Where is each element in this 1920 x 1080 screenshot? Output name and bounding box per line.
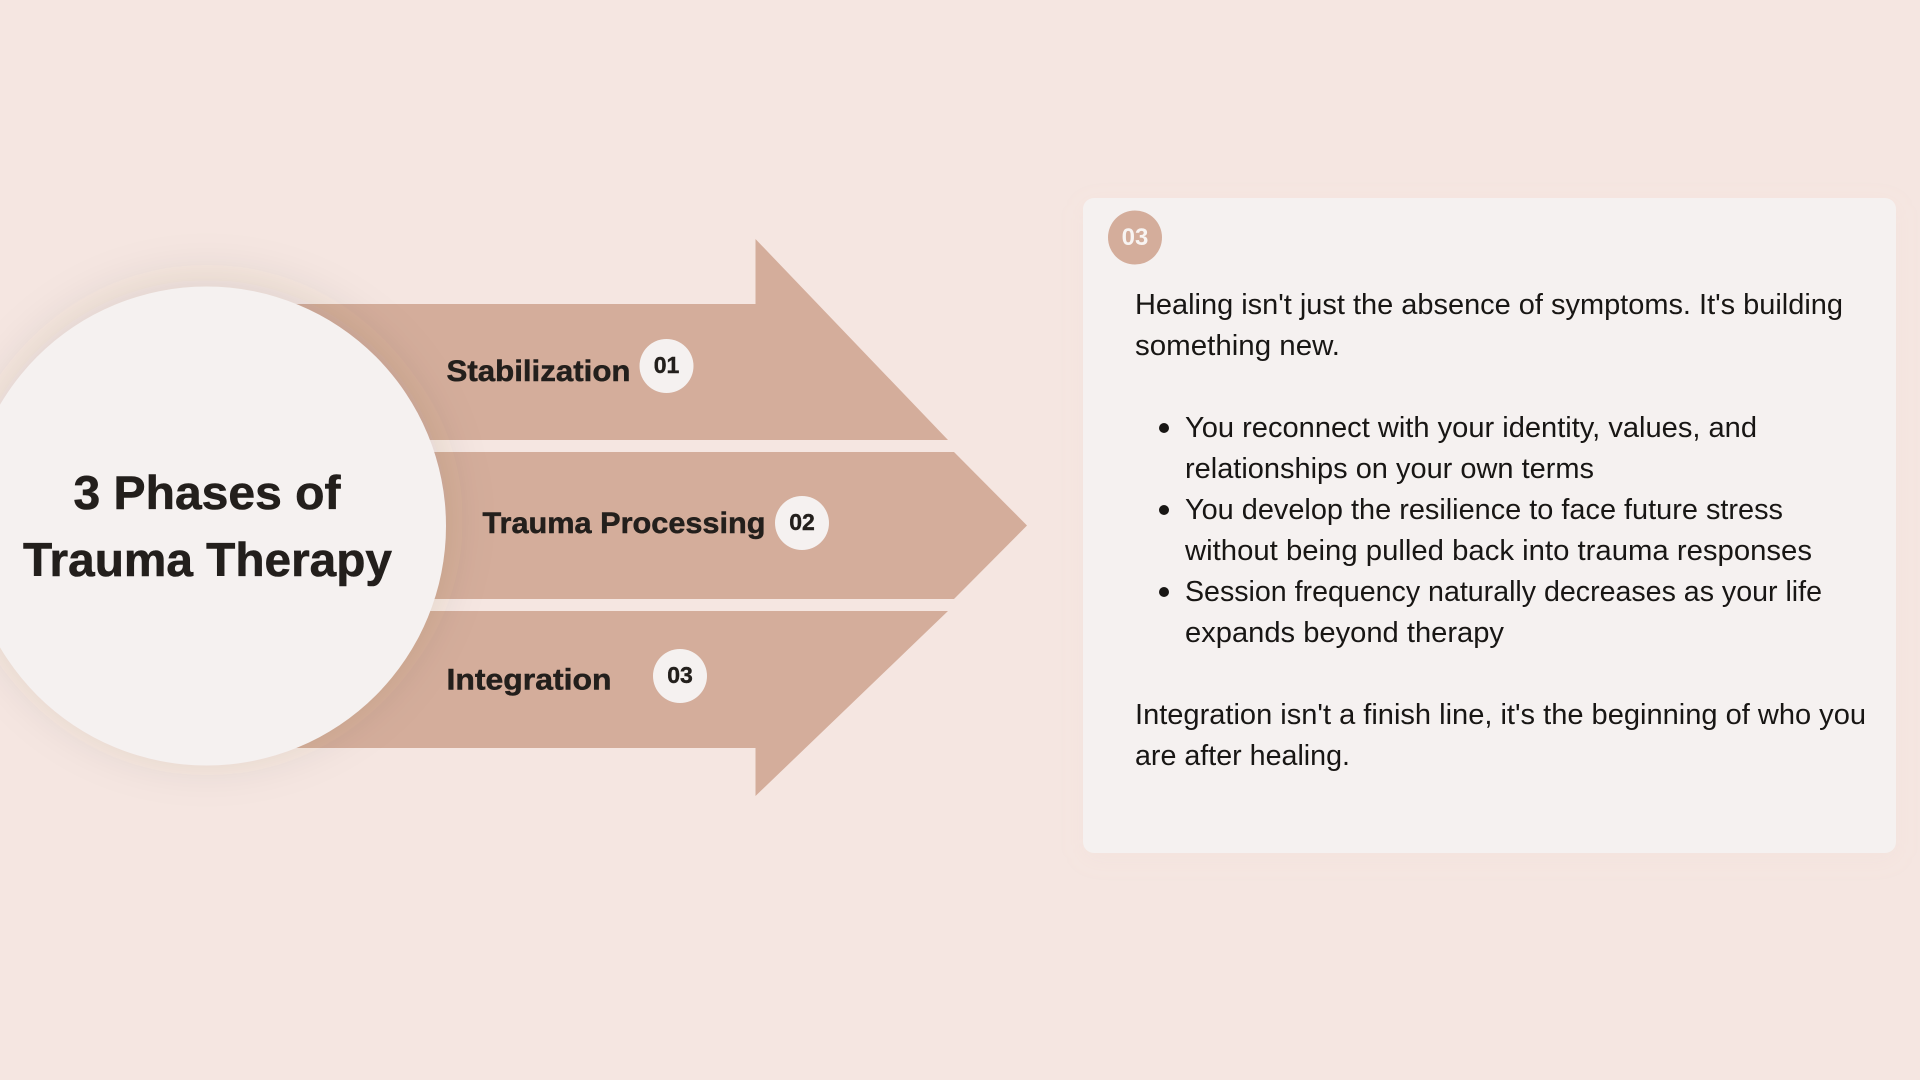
phase 1 label: Stabilization — [446, 355, 630, 388]
detail panel — [1083, 198, 1896, 853]
intro paragraph — [1135, 289, 1843, 362]
title — [23, 466, 392, 586]
badge 02: 02 — [789, 509, 815, 535]
panel shadow — [1083, 204, 1896, 859]
phase 2 label: Trauma Processing — [482, 507, 766, 540]
bullet 2: You develop the resilience to face future stress — [1185, 494, 1783, 526]
bullet 2 — [1159, 494, 1812, 567]
badge 01: 01 — [654, 352, 679, 378]
bullet 3 — [1159, 576, 1822, 649]
badge 03: 03 — [667, 662, 693, 688]
title: 3 Phases of — [74, 466, 341, 519]
panel badge 03 — [1108, 210, 1162, 264]
bullet 2: without being pulled back into trauma responses — [1184, 535, 1812, 567]
arrow group: three phase arrows — [250, 239, 1027, 796]
bullet 3: expands beyond therapy — [1185, 617, 1505, 649]
bullet 1 — [1159, 412, 1757, 485]
phase 3 label: Integration — [446, 664, 612, 696]
arrow: stabilization — [250, 239, 948, 440]
badge 02 — [775, 496, 829, 550]
intro paragraph: something new. — [1135, 330, 1340, 362]
phase 2 label — [482, 496, 829, 550]
panel badge 03: 03 — [1122, 224, 1148, 251]
badge 01 — [640, 339, 694, 393]
closing paragraph: are after healing. — [1135, 740, 1350, 772]
circle shadow — [0, 280, 447, 760]
intro paragraph: Healing isn't just the absence of symptoms. It's building — [1135, 289, 1843, 321]
bullet list — [1159, 412, 1822, 649]
phase 3 label — [446, 649, 707, 703]
bullet 1: You reconnect with your identity, values, and — [1185, 412, 1757, 444]
title: Trauma Therapy — [23, 533, 392, 586]
phase 1 label — [446, 339, 694, 393]
arrow: trauma processing — [250, 452, 1027, 599]
closing paragraph — [1135, 699, 1866, 772]
central circle with title — [0, 286, 446, 766]
badge 03 — [653, 649, 707, 703]
arrow: integration — [250, 611, 948, 796]
bullet 1: relationships on your own terms — [1185, 453, 1594, 485]
closing paragraph: Integration isn't a finish line, it's the beginning of who you — [1135, 699, 1866, 731]
bullet 3: Session frequency naturally decreases as your life — [1185, 576, 1822, 608]
